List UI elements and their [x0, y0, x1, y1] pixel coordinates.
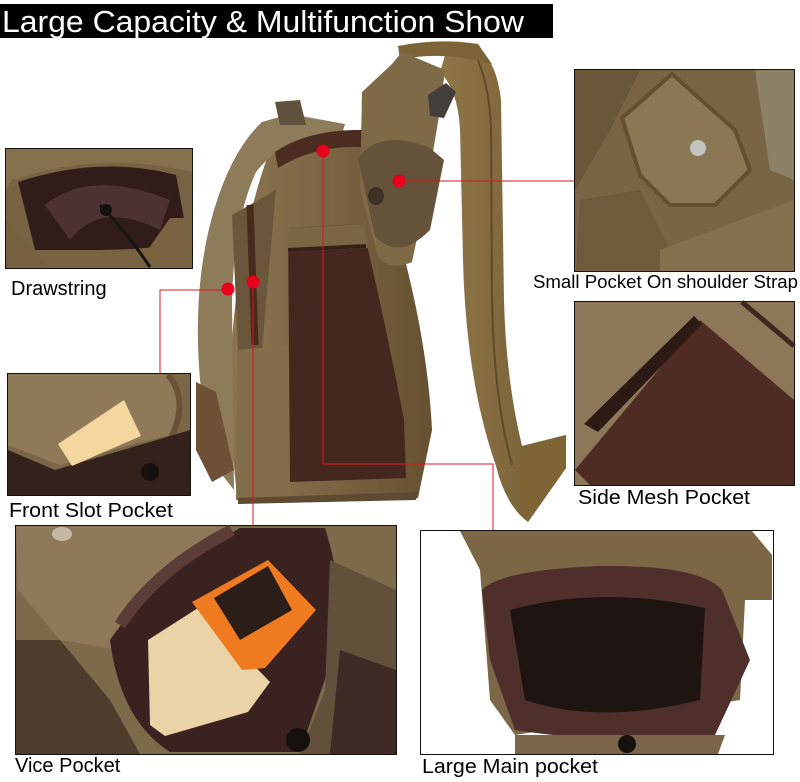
mesh pocket: [288, 224, 406, 482]
front pocket: [232, 190, 276, 350]
bag main body: [231, 131, 432, 502]
label: drawstring: Drawstring: [11, 278, 107, 300]
callout: small pocket line: [392, 174, 574, 188]
label: side mesh pocket: Side Mesh Pocket: [578, 487, 750, 509]
title: Large Capacity & Multifunction Show: [2, 4, 525, 39]
panel: large main pocket: [420, 530, 774, 754]
top handle and buckle: [398, 41, 492, 64]
buckles: [196, 382, 234, 482]
panel: front slot pocket: [8, 374, 190, 496]
panel: small pocket on shoulder strap: [574, 70, 794, 272]
top opening trim: [275, 130, 374, 168]
label: large main pocket: Large Main pocket: [422, 756, 598, 778]
callout: vice pocket line: [246, 276, 260, 525]
panel: side mesh pocket: [574, 302, 794, 486]
bottom edge: [238, 492, 418, 504]
central backpack side view: [196, 41, 566, 522]
panel: drawstring: [6, 148, 192, 268]
panel: vice pocket: [16, 526, 396, 754]
front flap: [198, 114, 345, 490]
shoulder strap: [440, 44, 566, 522]
callout: front slot pocket line: [160, 282, 234, 373]
callout: large main pocket line: [316, 144, 493, 530]
label: vice pocket: Vice Pocket: [15, 755, 121, 777]
label: front slot pocket: Front Slot Pocket: [9, 500, 173, 522]
label: small pocket on shoulder strap: Small Pocket On shoulder Strap: [533, 271, 798, 292]
side pocket on strap: [358, 52, 456, 266]
